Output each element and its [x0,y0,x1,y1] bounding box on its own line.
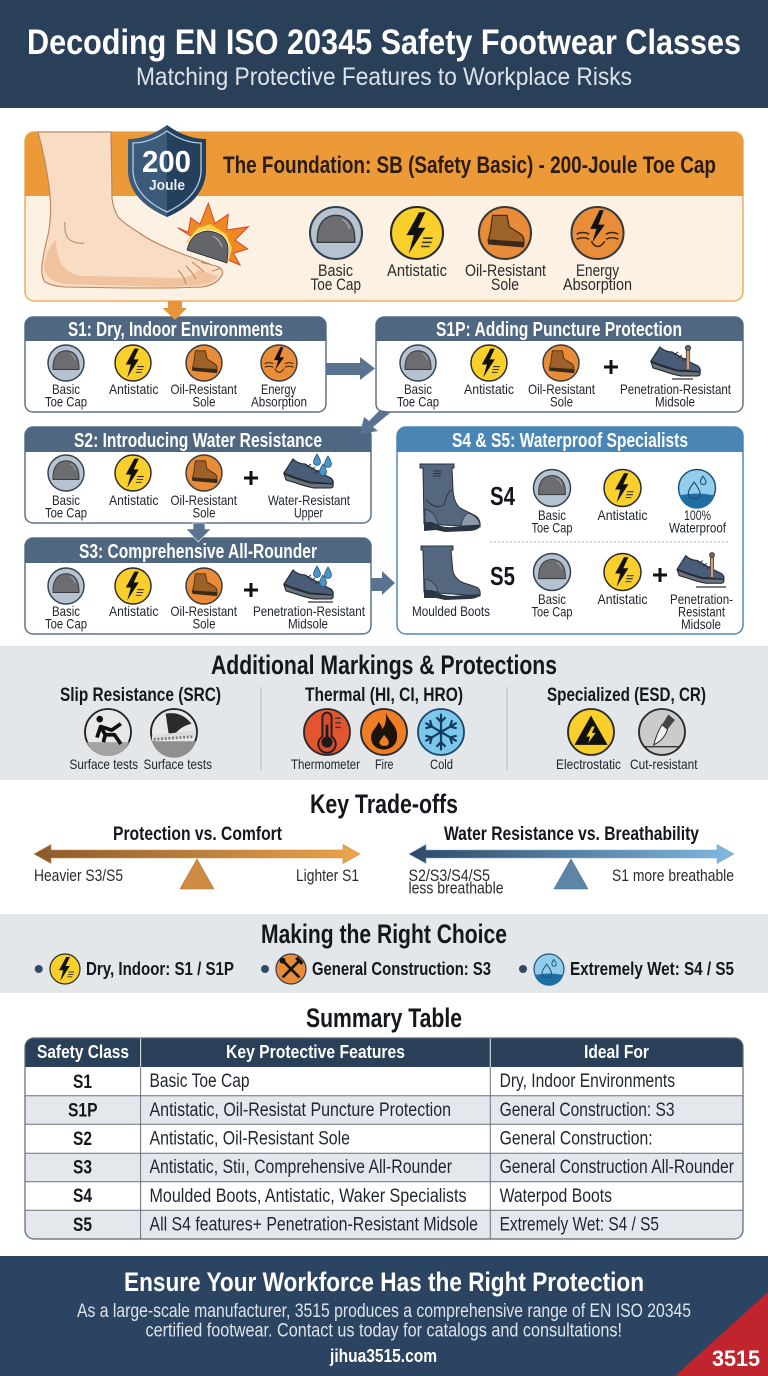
icon: oil-resistant sole [465,207,546,294]
S1P features: Penetration-Resistant [620,381,731,397]
S5 label: S5 [490,561,515,591]
icon: short boot S5 [421,546,480,600]
panel: S3: S3: Comprehensive All-Rounder [79,541,317,563]
shield: 200 Joule: 200 [142,144,191,179]
S5 features: Basic [538,591,566,607]
footer text: certified footwear. Contact us today for catalogs and consultations! [146,1320,622,1342]
table row S5 [73,1214,659,1236]
boots caption: Moulded Boots [412,603,490,619]
panel: key trade-offs [34,789,734,898]
S2 features: Toe Cap [45,504,87,520]
S1 features: Energy [261,381,296,397]
S2 features: Sole [192,504,216,520]
icon: oil-resistant sole: Sole [491,276,519,294]
S3 features: Toe Cap [45,616,87,632]
table row S5: All S4 features+ Penetration-Resistant Midsole [150,1214,478,1236]
arrow: S2 to S3 [186,523,211,542]
S3 features: Sole [192,616,216,632]
panel: S4 and S5: S4 & S5: Waterproof Specialists [452,430,688,452]
footer url: jihua3515.com [329,1346,437,1366]
heading: summary table: Summary Table [306,1003,462,1033]
logo corner [675,1292,768,1376]
impact burst and toe cap [178,203,248,265]
panel: S2: S2: Introducing Water Resistance [74,430,322,452]
table header: Ideal For [584,1042,649,1062]
heading: Key Trade-offs [310,789,458,819]
S2 features: Water-Resistant [268,492,350,508]
icon: tall boot S4 [420,464,480,532]
table row S5: S5 [73,1215,92,1236]
panel: additional markings [0,646,768,780]
choice: extremely wet [519,954,734,986]
S1 features: Oil-Resistant [170,381,237,397]
S1 features: Sole [192,394,216,410]
S1 features: Toe Cap [45,394,87,410]
icon: energy absorption: Energy [576,262,620,280]
table row S1 [73,1071,675,1093]
icon: antistatic: Antistatic [387,262,447,280]
group: thermal: Thermal (HI, CI, HRO) [305,685,463,706]
choice: dry indoor [35,954,234,984]
trade-off: water resistance vs breathability: Water Resistance vs. Breathability [444,824,699,845]
group: specialized: Electrostatic [556,756,621,772]
table row S4: Waterpod Boots [500,1186,612,1207]
table row S1P: General Construction: S3 [500,1100,675,1121]
choice: extremely wet: Extremely Wet: S4 / S5 [570,959,734,979]
footer heading: Ensure Your Workforce Has the Right Protection [124,1267,644,1297]
S2 features: Basic [52,492,80,508]
panel: S1: S1: Dry, Indoor Environments [68,319,283,341]
S3 features [45,566,365,632]
trade-off: water resistance vs breathability: S1 more breathable [612,867,734,885]
panel: S2 [25,427,371,523]
table row S4: Moulded Boots, Antistatic, Waker Specialists [150,1186,466,1207]
S3 features: Penetration-Resistant [253,603,365,619]
foot illustration [38,132,223,288]
group: specialized [547,685,706,772]
icon: energy absorption [563,207,632,294]
choice: dry indoor: Dry, Indoor: S1 / S1P [86,959,234,979]
logo corner: 3515 [712,1346,760,1371]
S1P features: Midsole [655,394,695,410]
group: thermal: Thermometer [291,756,360,772]
group: slip resistance: Surface tests [144,756,212,772]
S2 features: Antistatic [109,492,158,508]
group: specialized: Cut-resistant [630,756,698,772]
S1 features: Absorption [251,394,307,410]
S2 features [45,454,350,520]
S3 features: Oil-Resistant [170,603,237,619]
trade-off: protection vs comfort: Protection vs. Comfort [113,824,283,845]
S1P features: Oil-Resistant [528,381,595,397]
table row S3: S3 [73,1158,92,1178]
table row S4: S4 [73,1186,92,1207]
header banner [0,0,768,108]
S5 features: Toe Cap [532,604,573,620]
table row S1: Basic Toe Cap [150,1071,250,1092]
S5 features [532,552,733,632]
S1P features: Basic [404,381,432,397]
footer [0,1256,768,1376]
arrow: foundation to S1 [162,301,187,320]
shield: 200 Joule [128,125,206,217]
arrow: S1P to S2 [360,410,391,434]
S3 features: Midsole [288,616,328,632]
trade-off: water resistance vs breathability [408,824,734,898]
S1P features: Sole [550,394,573,410]
summary table [25,1038,743,1239]
table row S3 [73,1157,735,1178]
S1P features: Toe Cap [397,394,439,410]
S4 features: Toe Cap [532,520,573,536]
panel: S1P [376,317,743,412]
panel: S1 [25,317,326,412]
heading: Making the Right Choice [261,919,507,949]
S1 features: Antistatic [109,381,158,397]
subtitle: Matching Protective Features to Workplace Risks [136,63,632,91]
arrow: S3 to S4 S5 [371,571,395,595]
S5 features: Midsole [681,616,721,632]
group: slip resistance: Surface tests [70,756,138,772]
icon: energy absorption: Absorption [563,276,632,294]
trade-off: protection vs comfort [34,824,360,889]
S5 features: Resistant [678,604,725,620]
table row S1P: S1P [68,1100,98,1122]
icon: oil-resistant sole: Oil-Resistant [465,262,546,280]
table row S1: S1 [73,1072,92,1093]
S3 features: Antistatic [109,603,158,619]
panel: S3 [25,538,371,634]
table row S1P: Antistatic, Oil-Resistat Puncture Protection [150,1100,451,1121]
shield: 200 Joule: Joule [149,177,185,194]
footer text [77,1301,691,1342]
group: slip resistance [60,685,221,772]
table row S4 [73,1186,612,1207]
S2 features: Upper [294,504,323,520]
icon: antistatic [387,207,447,280]
choice: general construction: General Construction: S3 [312,959,491,979]
panel: S1P: S1P: Adding Puncture Protection [436,319,682,341]
group: thermal: Fire [375,756,394,772]
trade-off: protection vs comfort: Heavier S3/S5 [34,867,123,885]
table row S5: Extremely Wet: S4 / S5 [500,1214,659,1236]
panel: making the right choice [0,914,768,993]
S4 features: Basic [538,507,566,523]
icon: basic toe cap: Basic [318,262,353,280]
choice: general construction [261,954,491,984]
S4 features [532,470,726,536]
table row S2: General Construction: [500,1128,653,1150]
S2 features: Oil-Resistant [170,492,237,508]
S4 features: Waterproof [669,520,726,536]
table row S2: Antistatic, Oil-Resistant Sole [150,1128,350,1150]
table header: Key Protective Features [226,1042,405,1062]
table row S3: Antistatic, Stiı, Comprehensive All-Rounder [150,1157,453,1178]
heading: Additional Markings & Protections [211,650,557,680]
table header: Safety Class [37,1042,129,1062]
table row S2 [73,1128,653,1150]
S1P features: Antistatic [464,381,514,397]
S1 features [45,345,307,410]
table header [37,1042,649,1062]
table row S2: S2 [73,1129,92,1150]
trade-off: water resistance vs breathability: less breathable [408,880,504,898]
S5 features: Antistatic [598,591,648,607]
trade-off: protection vs comfort: Lighter S1 [296,867,359,885]
icon: basic toe cap: Toe Cap [310,276,361,294]
S4 features: 100% [684,507,711,523]
S5 features: Penetration- [670,591,733,607]
arrow: S1 to S1P [326,357,375,380]
table row S1P [68,1100,675,1122]
S4 label: S4 [490,481,515,511]
trade-off: water resistance vs breathability: S2/S3/S4/S5 [408,867,490,885]
panel: S4 and S5 [397,427,743,634]
panel: foundation SB [25,125,743,301]
S3 features: Basic [52,603,80,619]
group: slip resistance: Slip Resistance (SRC) [60,685,221,706]
S1P features [397,345,731,410]
S1 features: Basic [52,381,80,397]
group: thermal: Cold [430,756,453,772]
table row S1: Dry, Indoor Environments [500,1071,675,1092]
icon: basic toe cap [310,207,362,294]
group: thermal [291,685,464,772]
S4 features: Antistatic [598,507,648,523]
group: specialized: Specialized (ESD, CR) [547,685,706,706]
